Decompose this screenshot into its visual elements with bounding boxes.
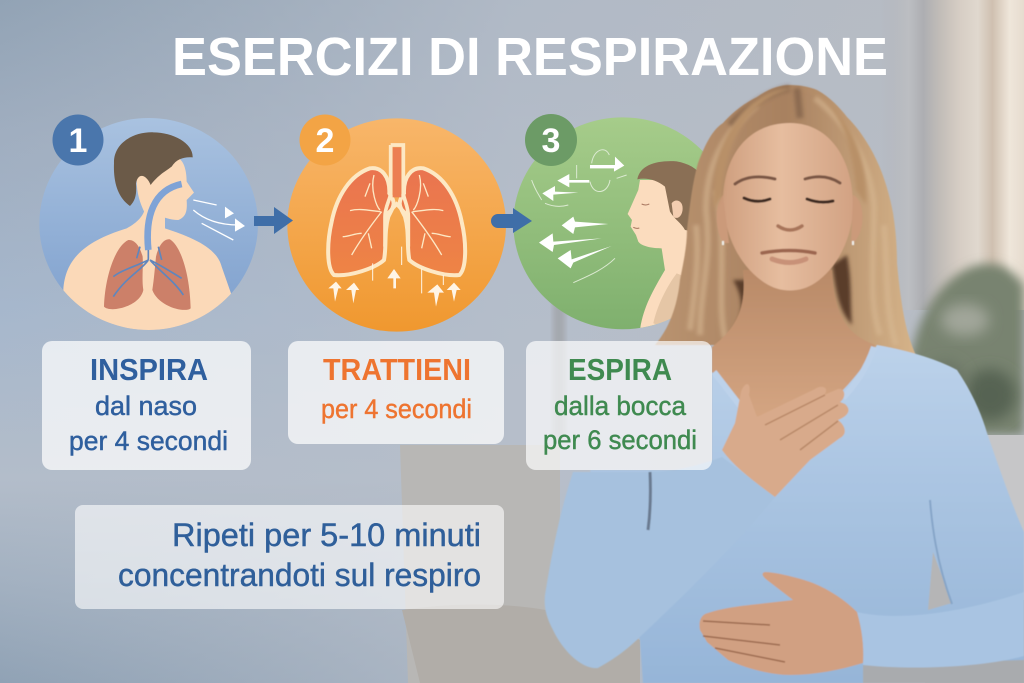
panel: repeat instruction: concentrandoti sul respiro <box>118 557 481 593</box>
panel: inhale <box>42 341 251 470</box>
eyes, eyebrows, nose and lips <box>735 177 840 262</box>
neck shade <box>654 274 681 324</box>
panel: exhale: ESPIRA <box>568 352 672 387</box>
man hair <box>114 132 193 206</box>
step circle 2: hold <box>287 118 506 332</box>
collar <box>714 347 874 412</box>
exhale arrows <box>539 157 624 268</box>
badge 1 <box>52 114 104 166</box>
panel: repeat instruction <box>75 505 504 609</box>
hair parting <box>730 88 800 125</box>
sleeve fold <box>648 472 650 530</box>
panel: inhale: INSPIRA <box>90 352 208 387</box>
panel: inhale: per 4 secondi <box>69 426 228 456</box>
right arm crease <box>930 500 952 604</box>
step circle 3: exhale <box>514 117 703 330</box>
panel: inhale: dal naso <box>95 391 197 421</box>
shirt torso and right arm <box>590 345 1024 683</box>
lower finger lines <box>703 621 785 662</box>
upper hand on chest <box>722 384 849 497</box>
left lung branches <box>343 175 382 255</box>
airflow arrows <box>193 200 238 240</box>
badge 3: 3 <box>542 122 560 160</box>
neck and chest <box>712 270 875 417</box>
panel: repeat instruction: Ripeti per 5-10 minuti <box>172 517 481 553</box>
arrow: step 2 to step 3 <box>491 208 532 233</box>
hair back <box>655 85 917 357</box>
lungs right <box>400 168 465 275</box>
title: ESERCIZI DI RESPIRAZIONE <box>172 27 888 87</box>
airway <box>148 184 182 250</box>
badge 3 <box>525 114 577 166</box>
hair dark underside <box>725 255 852 342</box>
right sleeve lower <box>857 592 1024 668</box>
trachea <box>385 145 408 247</box>
ears with earrings <box>717 195 863 245</box>
badge 2 <box>300 114 350 166</box>
left sleeve <box>545 457 775 668</box>
finger lines <box>765 395 838 450</box>
panel: exhale <box>526 341 712 470</box>
panel: hold: TRATTIENI <box>323 352 471 387</box>
right lung branches <box>412 175 451 255</box>
sofa below right sleeve <box>863 660 1024 683</box>
airflow traces <box>532 150 627 283</box>
badge 1: 1 <box>69 122 87 160</box>
person with open mouth <box>628 180 688 328</box>
lungs <box>104 240 143 309</box>
sofa gap between torso and sleeve <box>928 552 952 610</box>
lower hand on belly <box>699 572 863 675</box>
woman with hands on chest and belly <box>545 85 1024 683</box>
step circle 1: inhale <box>39 118 258 333</box>
panel: hold <box>288 341 504 444</box>
hair front strands <box>714 88 866 210</box>
rising air arrows <box>328 269 461 307</box>
person hair <box>637 161 697 230</box>
lungs left <box>328 168 394 275</box>
arrow: step 1 to step 2 <box>254 207 293 234</box>
panel: hold: per 4 secondi <box>321 394 472 424</box>
panel: exhale: dalla bocca <box>554 391 687 421</box>
face <box>723 123 853 290</box>
badge 2: 2 <box>316 122 334 160</box>
man face <box>137 157 194 220</box>
ear <box>672 201 683 218</box>
bronchi <box>113 247 183 297</box>
panel: exhale: per 6 secondi <box>543 425 697 455</box>
man body <box>63 207 233 333</box>
hair streaks <box>690 98 896 345</box>
